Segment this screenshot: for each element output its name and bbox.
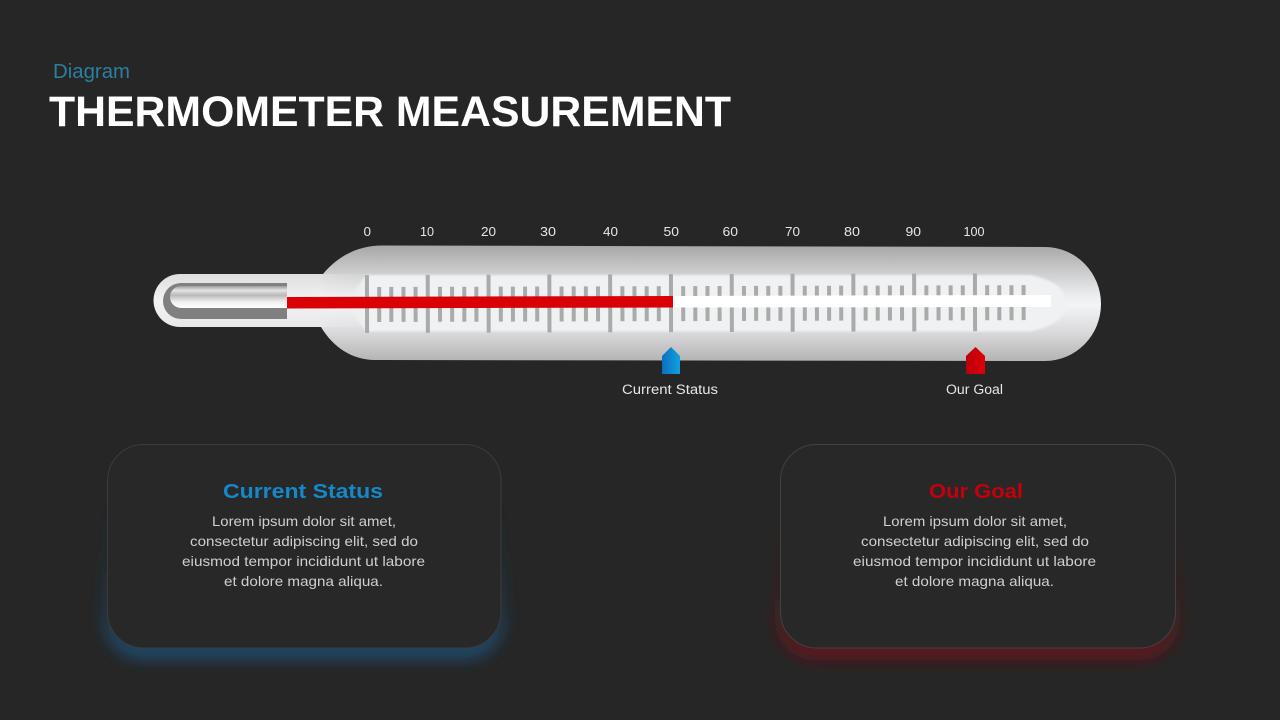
eyebrow: Diagram: Diagram (53, 61, 130, 83)
icon: blue arrow (662, 347, 680, 374)
thermometer (154, 246, 1101, 361)
icon: red arrow (966, 347, 985, 374)
inner scale panel (345, 275, 1066, 332)
scale labels: 80 (844, 224, 860, 239)
title: THERMOMETER MEASUREMENT (49, 88, 731, 136)
scale labels: 20 (481, 224, 496, 239)
bulb capsule (163, 283, 287, 319)
scale labels: 60 (722, 224, 738, 239)
panel: our goal (775, 444, 1180, 660)
scale labels: 40 (603, 224, 618, 239)
panel glow (775, 470, 1180, 660)
tip of the thermometer (154, 274, 323, 327)
scale labels: 90 (906, 224, 921, 239)
red mercury column (287, 296, 673, 308)
panel body text: Lorem ipsum dolor sit amet, (883, 513, 1067, 529)
panel glow (102, 470, 506, 660)
marker: current status (622, 347, 718, 397)
capsule highlight (170, 286, 287, 308)
panel heading: Our Goal (929, 480, 1023, 503)
panel body text: eiusmod tempor incididunt ut labore (853, 553, 1096, 569)
panel body text: et dolore magna aliqua. (895, 573, 1054, 589)
panel body text: consectetur adipiscing elit, sed do (861, 533, 1089, 549)
scale ticks (367, 273, 1024, 333)
major ticks (367, 273, 975, 333)
panel body text: Lorem ipsum dolor sit amet, (212, 513, 396, 529)
panel card (108, 444, 501, 648)
panel: current status (102, 444, 506, 660)
panel heading: Current Status (223, 480, 383, 503)
panel body text: et dolore magna aliqua. (224, 573, 383, 589)
scale labels: 70 (785, 224, 800, 239)
panel body text: eiusmod tempor incididunt ut labore (182, 553, 425, 569)
panel body text (853, 513, 1096, 589)
panel body text: consectetur adipiscing elit, sed do (190, 533, 418, 549)
scale labels: 0 (364, 224, 371, 239)
tip blend into body (323, 274, 342, 286)
marker: our goal (946, 347, 1003, 397)
scale labels: 30 (540, 224, 556, 239)
panel body text (182, 513, 425, 589)
white channel (673, 295, 1051, 308)
minor ticks (379, 285, 1024, 322)
scale labels: 50 (664, 224, 679, 239)
scale labels: 100 (964, 224, 984, 239)
marker label: Our Goal (946, 382, 1003, 397)
scale labels: 10 (420, 224, 434, 239)
marker label: Current Status (622, 382, 718, 397)
capsule outer (163, 283, 287, 319)
scale labels (364, 224, 984, 239)
panel card (780, 444, 1176, 648)
glass body (321, 246, 1101, 361)
